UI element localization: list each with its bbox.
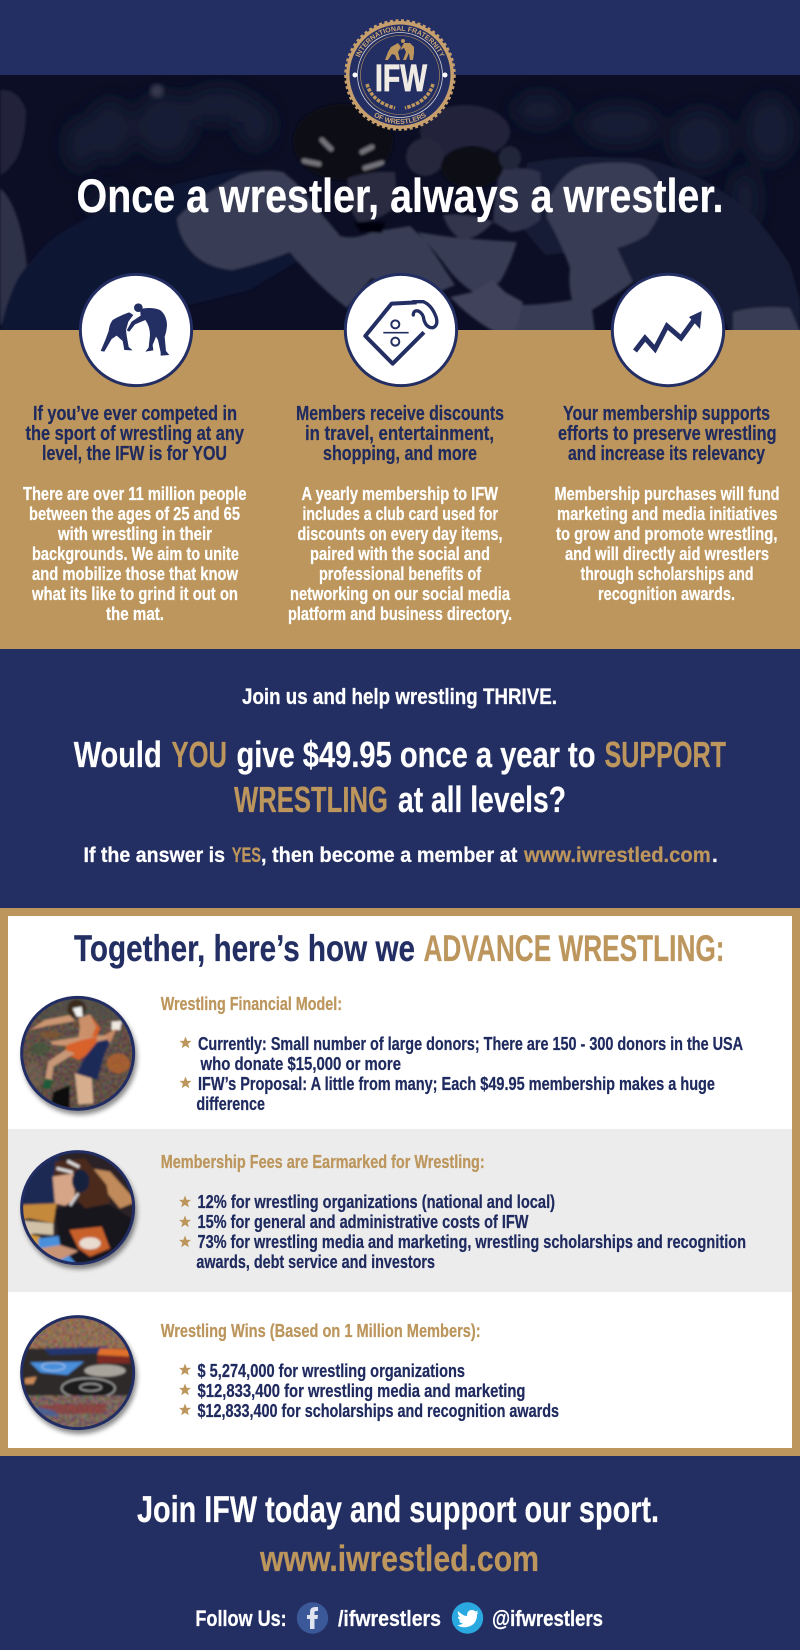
list: difference	[196, 1094, 265, 1114]
body: through scholarships and	[580, 564, 754, 584]
call to action panel	[0, 649, 800, 908]
join line: Join us and help wrestling THRIVE.	[242, 684, 557, 709]
answer line: , then become a member at	[261, 844, 517, 867]
body	[288, 484, 512, 624]
section 1 text	[161, 994, 743, 1114]
heading: level, the IFW is for YOU	[42, 443, 227, 465]
body: includes a club card used for	[302, 504, 498, 524]
list: who donate $15,000 or more	[200, 1054, 401, 1074]
body: the mat.	[106, 604, 164, 624]
heading	[26, 403, 245, 465]
subheading: Wrestling Wins (Based on 1 Million Members):	[161, 1321, 481, 1341]
star bullets	[179, 1196, 191, 1207]
body	[554, 484, 780, 604]
answer line: YES	[232, 844, 261, 867]
column 2 text	[288, 403, 512, 624]
right wrestler face	[443, 214, 493, 240]
heading	[296, 403, 504, 465]
answer line: www.iwrestled.com	[523, 844, 711, 867]
photo: wrestling takedown	[17, 992, 140, 1115]
left wrestler back and arm	[177, 171, 372, 308]
section 3 text	[161, 1321, 559, 1421]
heading: If you’ve ever competed in	[33, 403, 237, 425]
facebook handle: /ifwrestlers	[338, 1606, 441, 1631]
top navy band	[0, 0, 800, 75]
heading	[558, 403, 776, 465]
column 3 text	[554, 403, 780, 604]
right wrestler singlet	[520, 157, 800, 332]
logo letters: IFW	[375, 58, 427, 100]
icon: rising chart arrow circle	[612, 274, 724, 386]
question: give $49.95 once a year to	[236, 734, 596, 775]
right wrestler hair and headgear	[420, 105, 510, 159]
list: $12,833,400 for scholarships and recognition awards	[198, 1401, 559, 1421]
icon: twitter	[452, 1602, 483, 1634]
hero photo: two wrestlers locked up	[0, 75, 800, 332]
body: platform and business directory.	[288, 604, 512, 624]
left wrestler singlet	[0, 170, 300, 332]
logo wrestlers	[385, 39, 414, 60]
list	[196, 1034, 743, 1114]
section 2 text	[161, 1152, 746, 1272]
left wrestler forearm	[340, 225, 456, 292]
subheading: Wrestling Financial Model:	[161, 994, 342, 1014]
body: with wrestling in their	[57, 524, 212, 544]
icon: wrestlers circle	[80, 274, 192, 386]
question: at all levels?	[398, 779, 566, 820]
right wrestler neck	[493, 168, 542, 232]
list: awards, debt service and investors	[196, 1252, 435, 1272]
question	[74, 734, 726, 820]
heading: shopping, and more	[323, 443, 477, 465]
heading: the sport of wrestling at any	[26, 423, 245, 445]
star bullets	[179, 1364, 191, 1375]
body: paired with the social and	[310, 544, 490, 564]
body: networking on our social media	[290, 584, 511, 604]
question: WRESTLING	[234, 779, 388, 820]
right wrestler forearm and hand	[418, 232, 517, 292]
list: $ 5,274,000 for wrestling organizations	[198, 1361, 465, 1381]
photo: young wrestler	[17, 1147, 140, 1270]
body	[23, 484, 246, 624]
left wrestler hair and headgear	[293, 104, 393, 180]
left: referee	[0, 90, 26, 175]
body: professional benefits of	[319, 564, 482, 584]
body: A yearly membership to IFW	[302, 484, 498, 504]
subheading: Membership Fees are Earmarked for Wrestling:	[161, 1152, 485, 1172]
logo ring text: INTERNATIONAL FRATERNITY	[355, 26, 445, 58]
body: There are over 11 million people	[23, 484, 246, 504]
logo laurels	[367, 84, 433, 108]
body: and mobilize those that know	[32, 564, 239, 584]
heading: in travel, entertainment,	[305, 423, 494, 445]
logo: IFW seal	[344, 19, 456, 131]
answer line	[84, 844, 718, 867]
star bullets	[180, 1036, 192, 1048]
twitter handle: @ifwrestlers	[492, 1606, 603, 1631]
section heading	[74, 928, 724, 969]
icon: discount tag circle	[345, 274, 457, 386]
logo: IFW seal: OF WRESTLERS	[374, 112, 426, 124]
body: recognition awards.	[598, 584, 735, 604]
gold benefits panel	[0, 330, 800, 649]
body: discounts on every day items,	[298, 524, 502, 544]
question: YOU	[172, 734, 227, 775]
right wrestler back and arm	[515, 162, 662, 332]
list	[196, 1192, 746, 1272]
list: 12% for wrestling organizations (national and local)	[198, 1192, 555, 1212]
body: what its like to grind it out on	[31, 584, 238, 604]
photo: tournament arena	[17, 1312, 140, 1435]
follow label: Follow Us:	[195, 1606, 287, 1631]
answer line: .	[712, 844, 718, 867]
question: SUPPORT	[604, 734, 726, 775]
gold framed panel	[0, 908, 800, 1456]
footer panel	[0, 1456, 800, 1650]
section heading: Together, here’s how we	[74, 928, 415, 969]
answer line: If the answer is	[84, 844, 225, 867]
heading: Members receive discounts	[296, 403, 504, 425]
body: between the ages of 25 and 65	[29, 504, 240, 524]
icon: facebook	[297, 1602, 328, 1634]
footer heading: Join IFW today and support our sport.	[137, 1489, 659, 1530]
footer url: www.iwrestled.com	[259, 1538, 539, 1579]
list: 15% for general and administrative costs of IFW	[198, 1212, 528, 1232]
list	[198, 1361, 559, 1421]
question: Would	[74, 734, 162, 775]
column 1 text	[23, 403, 246, 624]
body: backgrounds. We aim to unite	[32, 544, 239, 564]
list: $12,833,400 for wrestling media and marketing	[198, 1381, 526, 1401]
